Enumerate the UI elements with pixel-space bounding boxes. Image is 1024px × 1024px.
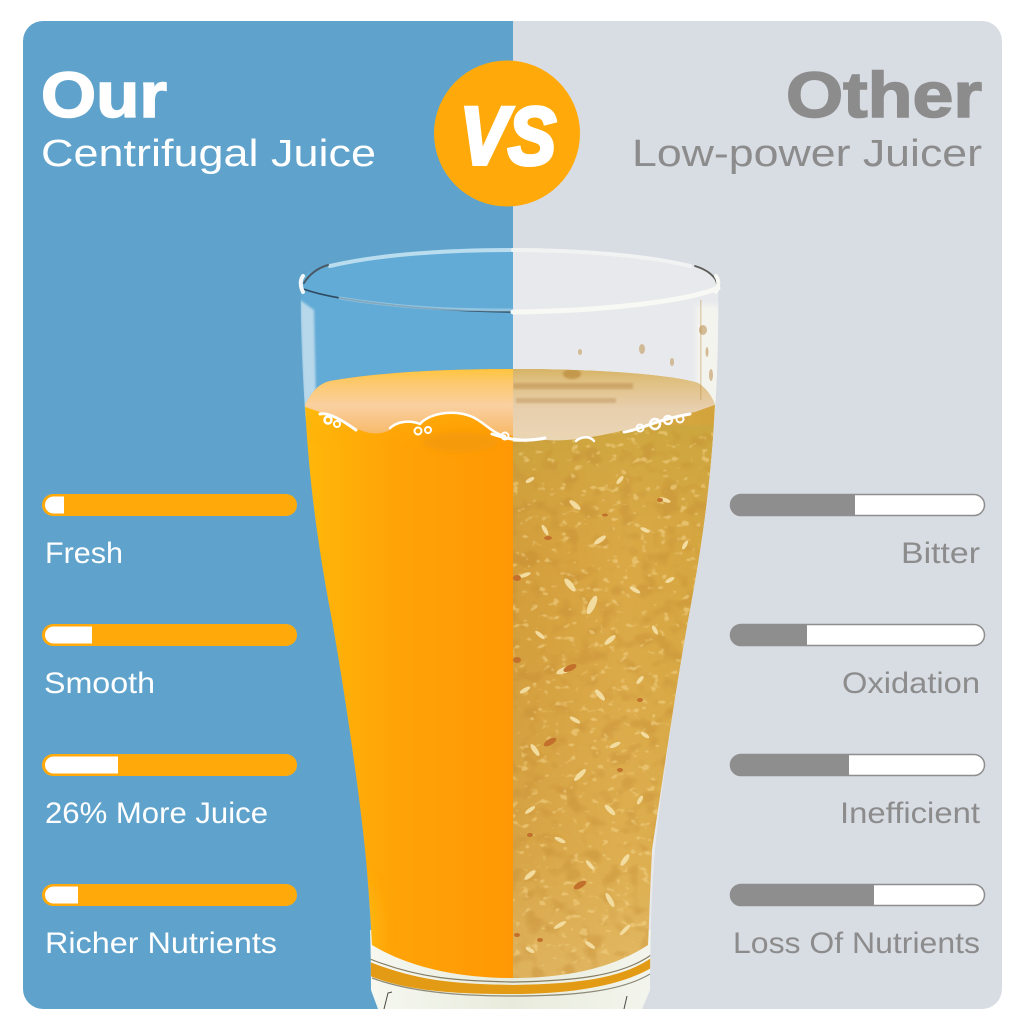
- label: fresh: Fresh: [45, 537, 123, 570]
- subheading: centrifugal juice: Centrifugal Juice: [41, 133, 376, 175]
- label: smooth: Smooth: [44, 667, 155, 700]
- subheading: low-power juicer: Low-power Juicer: [632, 133, 982, 175]
- blotchy pulp texture: [513, 430, 723, 980]
- residue marks on glass: [578, 325, 713, 381]
- panel: other juicer background: [513, 21, 1002, 1009]
- glass of juice: [290, 240, 733, 1020]
- right metric bars: [730, 494, 984, 960]
- label: oxidation: Oxidation: [842, 667, 980, 700]
- label: more juice: 26% More Juice: [45, 797, 268, 830]
- juice: pulpy half: [513, 360, 723, 990]
- heading: our: Our: [41, 59, 167, 131]
- glass side highlights: [300, 300, 720, 420]
- bar: more juice: [42, 754, 297, 776]
- vs badge: VS: [460, 91, 556, 182]
- heading: other: Other: [786, 59, 982, 131]
- residue streak: [700, 300, 702, 400]
- glass base: [370, 930, 651, 1009]
- bar: inefficient: [730, 754, 984, 776]
- label: inefficient: Inefficient: [840, 797, 981, 830]
- panel: our juicer background: [23, 21, 513, 1009]
- vs badge: [434, 60, 580, 206]
- label: bitter: Bitter: [901, 537, 980, 570]
- juice: smooth orange half: [300, 360, 513, 990]
- bar: loss of nutrients: [730, 884, 984, 906]
- surface bubbles: [320, 413, 690, 441]
- label: richer nutrients: Richer Nutrients: [45, 927, 277, 960]
- left metric bars: [42, 494, 297, 960]
- glass rim: [301, 250, 718, 312]
- bar: richer nutrients: [42, 884, 297, 906]
- label: loss of nutrients: Loss Of Nutrients: [733, 927, 980, 960]
- bar: smooth: [42, 624, 297, 646]
- bar: fresh: [42, 494, 297, 516]
- pulp specks dark: [513, 498, 663, 942]
- pulp specks light: [519, 475, 689, 954]
- bar: oxidation: [730, 624, 984, 646]
- bar: bitter: [730, 494, 984, 516]
